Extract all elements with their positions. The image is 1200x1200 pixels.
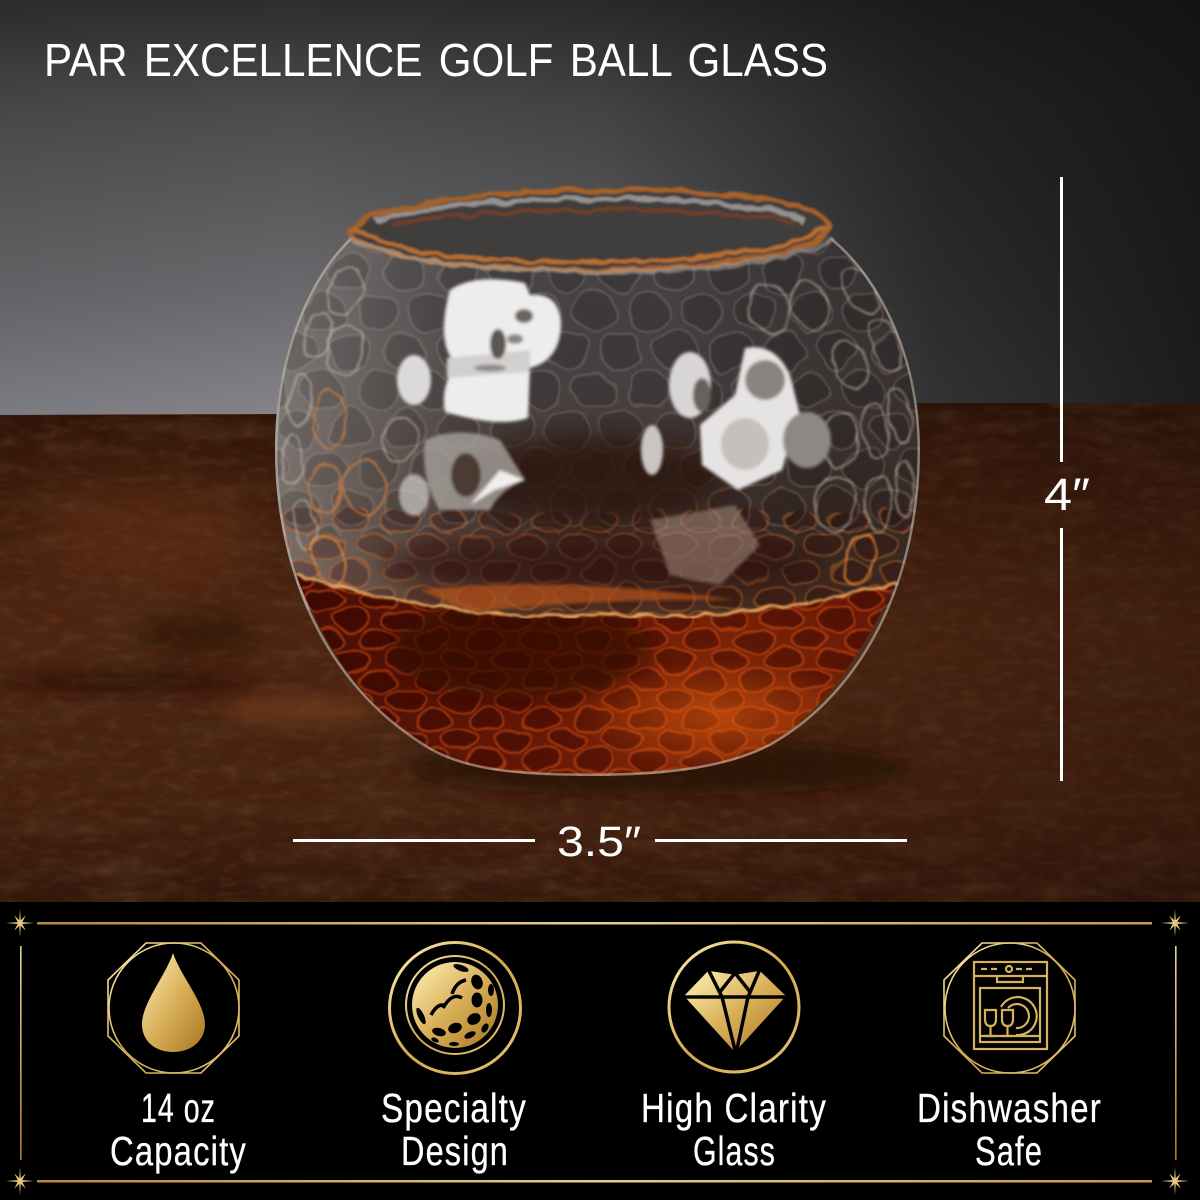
icon: water drop [108, 943, 239, 1073]
golf ball whiskey glass [260, 190, 940, 785]
icon: golf ball [390, 942, 520, 1074]
edge dimples [282, 260, 915, 589]
label: high clarity glass: Glass [693, 1128, 776, 1174]
icon: dishwasher [944, 943, 1075, 1073]
dimension: width 3.5 inches: 3.5″ [557, 818, 641, 866]
label: 14 oz capacity: Capacity [110, 1128, 247, 1174]
label: high clarity glass: High Clarity [641, 1085, 827, 1131]
liquid surface line [296, 575, 896, 616]
feature panel [0, 902, 1200, 1200]
label: dishwasher safe: Dishwasher [917, 1085, 1102, 1131]
icon: diamond [669, 942, 799, 1072]
label: 14 oz capacity [110, 1085, 247, 1174]
body edge light [275, 238, 920, 776]
rim [350, 190, 832, 272]
label: 14 oz capacity: 14 oz [141, 1085, 216, 1131]
label: specialty design: Specialty [381, 1085, 527, 1131]
glass body [260, 230, 940, 785]
dark streak on the wood [0, 675, 260, 689]
window reflections [397, 279, 831, 612]
label: dishwasher safe: Safe [975, 1128, 1043, 1174]
label: dishwasher safe [917, 1085, 1102, 1174]
label: high clarity glass [641, 1085, 827, 1174]
label: specialty design: Design [401, 1128, 509, 1174]
liquid [296, 575, 895, 776]
dimension: height 4 inches [1044, 177, 1090, 781]
glass shadow [410, 740, 910, 796]
background wall [0, 0, 1200, 420]
dimension: height 4 inches: 4″ [1044, 469, 1090, 520]
dark reflection band [455, 436, 725, 520]
wooden table [0, 403, 1200, 902]
dimension: width 3.5 inches [293, 818, 907, 866]
title: PAR EXCELLENCE GOLF BALL GLASS [44, 34, 828, 86]
decorative frame with stars [6, 909, 1189, 1195]
label: specialty design [381, 1085, 527, 1174]
